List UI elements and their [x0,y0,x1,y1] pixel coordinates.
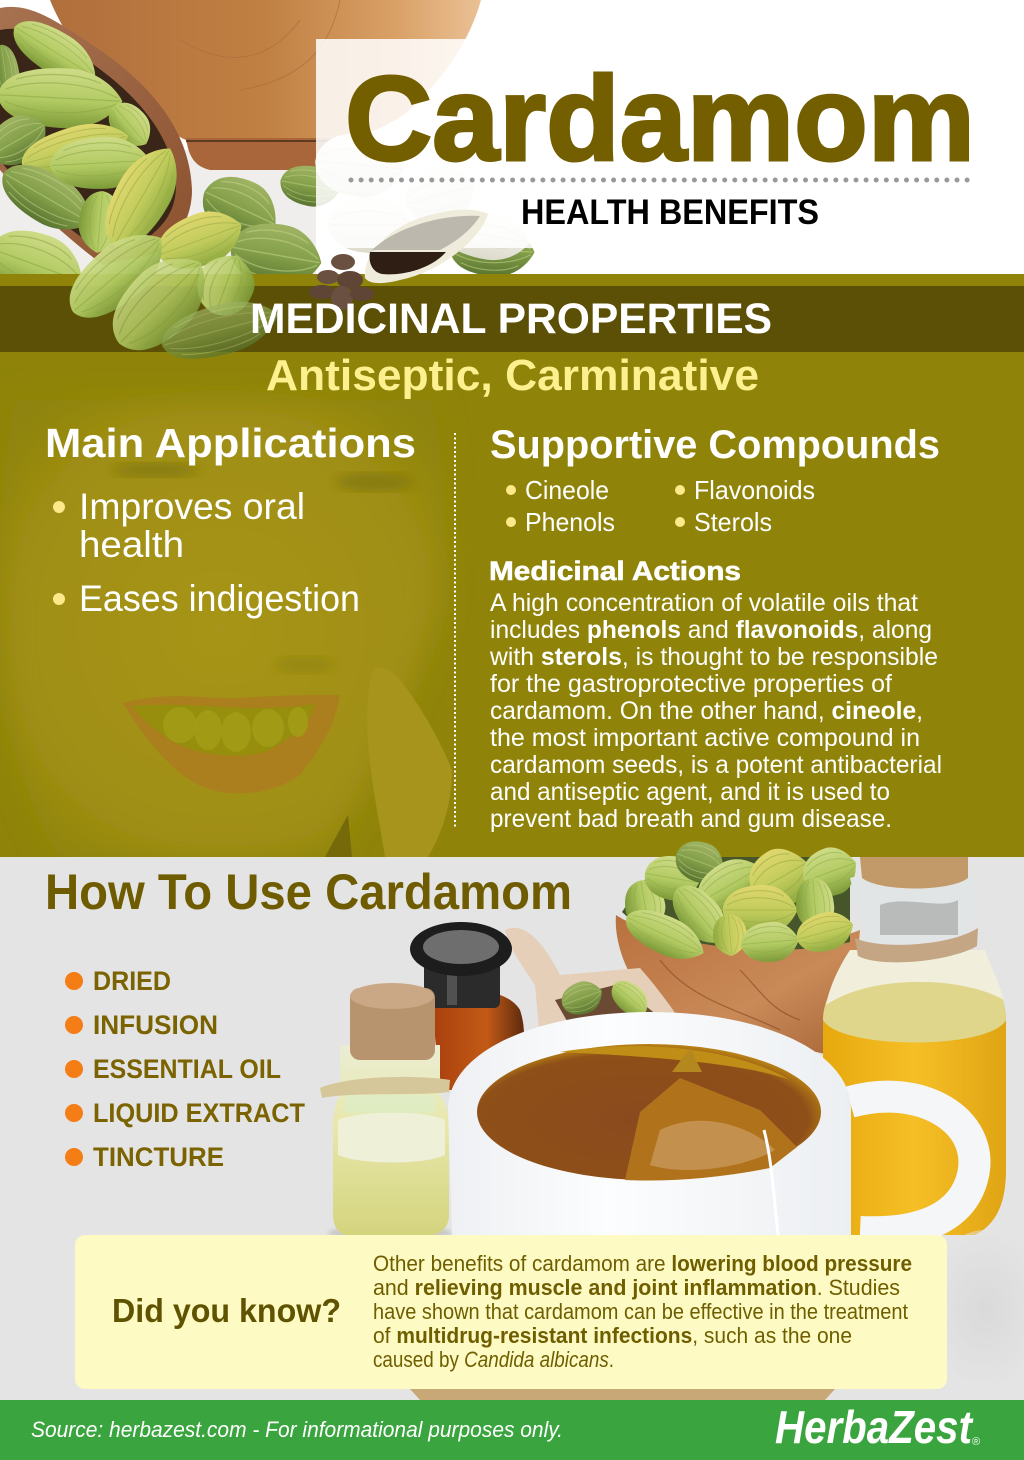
panel: medicinal properties background [0,274,1024,857]
callout: did you know: caused by Candida albicans. [373,1347,614,1372]
text block: medicinal actions: includes phenols and flavonoids, along [490,616,932,644]
woman's smiling face tinted photo [0,400,452,857]
header photo: wooden bowl, scoop and cardamom pods [0,0,536,312]
column: main applications: Improves oral [79,486,305,527]
banner band: medicinal properties [0,286,1024,352]
shadow behind did you know box [925,1230,1024,1390]
cut-open pod and seeds [309,210,488,310]
pods overlapping banner [55,217,284,370]
text block: medicinal actions: prevent bad breath and gum disease. [490,805,892,833]
photo: white mug of cardamom tea [448,1012,974,1235]
heading: medicinal properties: MEDICINAL PROPERTIES [250,295,772,343]
title: HEALTH BENEFITS [521,193,819,232]
text block: medicinal actions: and antiseptic agent, and it is used to [490,778,890,806]
text block: medicinal actions: cardamom seeds, is a potent antibacterial [490,751,942,779]
list: forms of use [65,966,305,1172]
column: supportive compounds: Phenols [525,507,615,537]
text block: medicinal actions: A high concentration of volatile oils that [490,589,918,617]
photo: small glass bottle with cork [320,983,452,1240]
text block: medicinal actions: for the gastroprotective properties of [490,670,892,698]
title: Cardamom [345,52,975,186]
text block: medicinal actions: cardamom. On the other hand, cineole, [490,697,923,725]
heading: how to use: How To Use Cardamom [45,864,572,920]
list: forms of use: TINCTURE [93,1142,224,1172]
photo: amber bottle with black cap [410,922,524,1090]
subtitle: properties: Antiseptic, Carminative [266,351,759,400]
photo: wooden bowl of cardamom pods [616,835,864,1055]
callout: did you know [75,1235,947,1389]
callout: did you know: have shown that cardamom can be effective in the treatment [373,1299,908,1324]
list: forms of use: DRIED [93,966,171,996]
column: supportive compounds: Cineole [525,475,609,505]
footer: Source: herbazest.com - For informational purposes only. [31,1417,563,1442]
column: main applications: Main Applications [45,420,416,466]
column: main applications: Eases indigestion [79,578,360,619]
text block: medicinal actions [489,556,942,833]
list: forms of use: INFUSION [93,1010,218,1040]
footer [0,1400,1024,1460]
header background [0,0,1024,274]
callout: did you know: Did you know? [112,1292,341,1329]
footer: HerbaZest [775,1401,973,1453]
column: supportive compounds: Flavonoids [694,475,815,505]
column: supportive compounds: Supportive Compounds [490,423,940,467]
footer: ® [972,1436,980,1448]
column: supportive compounds [490,423,940,537]
column: supportive compounds: Sterols [694,507,772,537]
photo: large bottle of yellow oil [823,857,1006,1235]
column: main applications: health [79,524,184,565]
white translucent title backing [316,39,1024,248]
text block: medicinal actions: with sterols, is thought to be responsible [489,643,938,671]
callout: did you know: of multidrug-resistant infections, such as the one [373,1323,852,1348]
photo: wooden scoop [505,928,680,1045]
column: main applications [45,420,416,619]
text block: medicinal actions: Medicinal Actions [489,556,741,586]
panel: how to use background [0,857,1024,1400]
list: forms of use: ESSENTIAL OIL [93,1054,281,1084]
callout: did you know: and relieving muscle and joint inflammation. Studies [373,1275,900,1300]
plate edge under callout [410,1389,835,1400]
text block: medicinal actions: the most important active compound in [490,724,920,752]
callout: did you know: Other benefits of cardamom are lowering blood pressure [373,1251,912,1276]
list: forms of use: LIQUID EXTRACT [93,1098,305,1128]
